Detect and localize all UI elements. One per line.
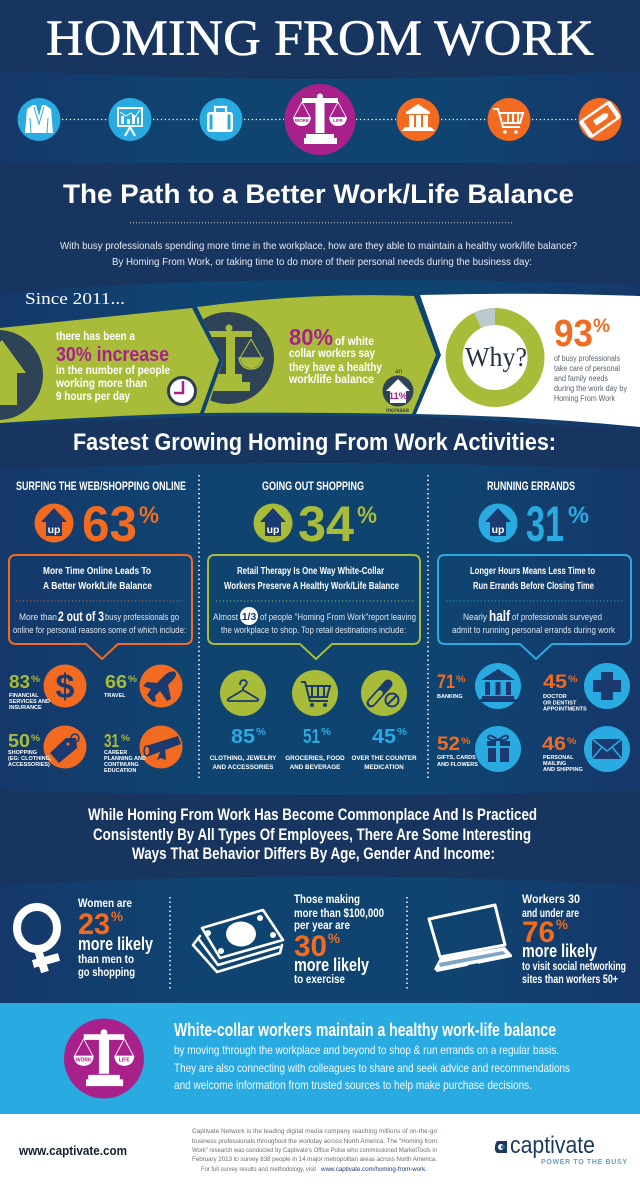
- item: shopping: ACCESSORIES): [8, 762, 50, 768]
- item: mail: AND SHIPPING: [543, 767, 583, 773]
- conclusion text: and welcome information from trusted sources to help make purchase decisions.: [174, 1078, 532, 1092]
- text: income stat: to exercise: [294, 974, 345, 986]
- item: banking: 71: [437, 672, 455, 693]
- text: 93 percent description: during the work day by: [554, 384, 627, 393]
- callout: online for personal reasons some of which include:: [13, 625, 186, 635]
- conclusion text: by moving through the workplace and beyond to shop & run errands on a regular basis.: [174, 1043, 559, 1057]
- stat: 93 percent: %: [593, 316, 610, 337]
- text: 30 percent: [55, 331, 170, 403]
- item: financial services: SERVICES AND: [9, 699, 50, 705]
- item: clothing: 85: [231, 726, 255, 748]
- item: career planning: %: [121, 733, 130, 743]
- item: medication: %: [397, 727, 407, 738]
- item: financial services: 83: [9, 672, 30, 692]
- text: income stat: more likely: [294, 955, 369, 975]
- panel: women: [17, 898, 153, 979]
- icon: work/life scale: LIFE: [119, 1057, 130, 1063]
- text: women stat: %: [111, 908, 124, 924]
- stat: up 34 percent: %: [357, 502, 377, 529]
- item: shopping: %: [31, 733, 40, 743]
- text: 30 percent: in the number of people: [56, 365, 170, 377]
- item: financial services: [9, 664, 86, 711]
- icon: suitcase: [200, 98, 242, 141]
- item: groceries: AND BEVERAGE: [290, 764, 340, 771]
- panel: conclusion: [0, 1003, 640, 1114]
- stat: up 31 percent: %: [568, 502, 589, 529]
- text: 80 percent: 80%: [289, 324, 333, 350]
- item: medication: [351, 670, 417, 771]
- item: gifts: GIFTS, CARDS: [437, 755, 476, 761]
- item: shopping: SHOPPING: [8, 750, 37, 756]
- heading: RUNNING ERRANDS: [487, 479, 575, 493]
- item: career planning: [104, 726, 182, 774]
- stat: up 63 percent: 63: [82, 496, 137, 552]
- text: 80 percent: [288, 324, 383, 386]
- stat: up 34 percent: 34: [298, 496, 354, 552]
- item: medication: MEDICATION: [364, 764, 404, 771]
- item: shopping: [8, 726, 86, 768]
- item: gifts: %: [461, 736, 471, 747]
- icon: work/life scale: WORK: [76, 1057, 92, 1063]
- text: 93 percent description: take care of personal: [554, 364, 620, 373]
- item: career planning: 31: [104, 731, 119, 751]
- text: 80 percent: of white: [335, 336, 374, 348]
- item: gifts: 52: [437, 734, 460, 755]
- item: financial services: %: [31, 674, 40, 684]
- callout: A Better Work/Life Balance: [43, 580, 152, 592]
- text: 93 percent description: [554, 354, 627, 403]
- item: doctor: OR DENTIST: [543, 700, 577, 706]
- about text: business professionals throughout the workday across North America. The "Homing from: [192, 1138, 437, 1145]
- text: young workers stat: %: [556, 916, 569, 932]
- item: financial services: FINANCIAL: [9, 693, 39, 699]
- icon: presentation chart: [108, 98, 152, 141]
- text: 30 percent: working more than: [55, 378, 147, 390]
- text: women stat: go shopping: [78, 967, 135, 979]
- item: shopping: (EG: CLOTHING,: [8, 756, 52, 762]
- item: clothing: [210, 670, 277, 771]
- icon: work/life scale: [64, 1018, 144, 1099]
- callout: [9, 555, 192, 659]
- item: gifts: [437, 726, 521, 772]
- icon: laptop: [429, 905, 512, 972]
- stat: up 63 percent: up: [48, 524, 60, 536]
- item: career planning: CAREER: [104, 750, 127, 756]
- item: financial services: INSURANCE: [9, 705, 42, 711]
- callout: Nearly: [463, 612, 487, 622]
- item: doctor: DOCTOR: [543, 694, 567, 700]
- text: income stat: Those making: [294, 894, 360, 906]
- text: women stat: more likely: [78, 934, 153, 954]
- text: 93 percent description: Homing From Work: [554, 394, 616, 403]
- item: doctor: APPOINTMENTS: [543, 706, 587, 712]
- callout: 1/3: [242, 611, 256, 623]
- heading: SURFING THE WEB/SHOPPING ONLINE: [16, 479, 186, 493]
- item: travel: TRAVEL: [104, 693, 126, 699]
- item: mail: MAILING: [543, 761, 566, 767]
- icon: house: [0, 330, 43, 420]
- stat: up 31 percent: 31: [526, 496, 564, 552]
- item: travel: %: [128, 674, 137, 684]
- text: 30 percent: there has been a: [56, 331, 136, 343]
- item: shopping: 50: [8, 731, 30, 751]
- text: young workers stat: and under are: [522, 908, 579, 920]
- item: mail: 46: [542, 734, 566, 755]
- icon: work/life scale: LIFE: [333, 118, 343, 123]
- icon: shopping cart: [488, 98, 530, 141]
- icon: jacket: [18, 98, 60, 141]
- callout: Workers Preserve A Healthy Work/Life Balance: [224, 580, 399, 592]
- intro text: [60, 241, 577, 268]
- stat: up 63 percent: [34, 496, 159, 552]
- callout: the workplace to shop. Top retail destinations include:: [221, 625, 406, 635]
- stat: up 34 percent: up: [267, 524, 279, 536]
- text: young workers stat: [522, 894, 626, 986]
- callout: 2 out of 3: [58, 608, 104, 624]
- text: young workers stat: more likely: [522, 941, 597, 961]
- icon: female symbol: [17, 907, 59, 972]
- text: 93 percent description: and family needs: [554, 374, 608, 383]
- panel: surfing the web: [8, 479, 192, 774]
- item: travel: [104, 664, 182, 708]
- text: 30 percent: 9 hours per day: [56, 391, 131, 403]
- panel: income: [193, 894, 384, 986]
- text: 80 percent: work/life balance: [288, 374, 374, 386]
- item: groceries: 51: [303, 726, 320, 748]
- logo: captivate: captivate: [510, 1132, 595, 1159]
- callout: Retail Therapy Is One Way White-Collar: [237, 565, 384, 577]
- badge: 11 percent increase: 11%: [389, 391, 408, 402]
- item: mail: [542, 726, 630, 773]
- badge: 11 percent increase: [382, 368, 414, 414]
- icon: stack of money: [193, 910, 283, 972]
- stat: 93 percent: 93: [554, 313, 593, 355]
- panel: arrow 30 percent increase: [0, 308, 219, 423]
- text: income stat: 30: [294, 930, 327, 963]
- title: HOMING FROM WORK: [46, 11, 594, 67]
- callout: Run Errands Before Closing Time: [473, 580, 594, 592]
- item: doctor: %: [568, 674, 578, 685]
- text: women stat: [78, 898, 153, 979]
- panel: arrow 80 percent: [182, 295, 436, 414]
- conclusion text: [174, 1043, 570, 1092]
- about text: Captivate Network is the leading digital media company reaching millions of on-the-go: [192, 1128, 437, 1135]
- item: banking: %: [456, 674, 466, 685]
- item: travel: 66: [105, 672, 127, 692]
- text: 30 percent: 30% increase: [56, 344, 169, 366]
- text: women stat: 23: [78, 908, 110, 941]
- chart: 93 percent donut: Why?: [465, 342, 527, 372]
- about text: February 2013 to survey 838 people in 14 major metropolitan areas across North America.: [192, 1156, 437, 1163]
- callout: Almost: [213, 612, 238, 622]
- callout: busy professionals go: [105, 612, 179, 622]
- item: mail: %: [567, 736, 577, 747]
- text: income stat: %: [328, 930, 341, 946]
- item: career planning: PLANNING AND: [104, 756, 146, 762]
- heading: behavior differs: Consistently By All Types Of Employees, There Are Some Interesting: [93, 826, 531, 844]
- heading: behavior differs: Ways That Behavior Differs By Age, Gender And Income:: [132, 845, 495, 863]
- icon row: [18, 84, 622, 155]
- item: gifts: AND FLOWERS: [437, 762, 478, 768]
- callout: half: [489, 608, 511, 625]
- item: clothing: %: [256, 727, 266, 738]
- heading: behavior differs: While Homing From Work Has Become Commonplace And Is Practiced: [88, 806, 537, 824]
- callout: admit to running personal errands during work: [452, 625, 615, 635]
- item: doctor: [543, 663, 630, 712]
- panel: going out shopping: [208, 479, 420, 771]
- stat: up 31 percent: up: [492, 524, 504, 536]
- heading: behavior differs: [88, 806, 537, 863]
- stat: up 31 percent: [478, 496, 589, 552]
- text: income stat: more than $100,000: [294, 908, 384, 920]
- logo: captivate: [495, 1132, 627, 1166]
- text: women stat: Women are: [78, 898, 132, 910]
- callout: Longer Hours Means Less Time to: [470, 565, 595, 577]
- item: financial services: $: [56, 668, 75, 706]
- panel: young workers: [429, 894, 626, 986]
- icon: bank: [396, 98, 440, 141]
- heading: path to better balance: The Path to a Better Work/Life Balance: [63, 179, 574, 209]
- callout: [438, 555, 631, 659]
- item: medication: OVER THE COUNTER: [351, 755, 417, 762]
- label: since 2011: Since 2011...: [25, 289, 125, 308]
- badge: 11 percent increase: an: [395, 368, 403, 375]
- heading: GOING OUT SHOPPING: [262, 479, 364, 493]
- item: clothing: CLOTHING, JEWELRY: [210, 755, 277, 762]
- text: income stat: per year are: [294, 920, 350, 932]
- chart: 93 percent donut: [454, 316, 536, 398]
- about text: Work" research was conducted by Captivate's Office Pulse who commissioned MarketTools in: [192, 1147, 437, 1154]
- callout: More than: [19, 612, 57, 622]
- heading: fastest growing: Fastest Growing Homing From Work Activities:: [73, 429, 556, 456]
- icon: scale: [203, 312, 274, 404]
- item: mail: PERSONAL: [543, 755, 574, 761]
- item: doctor: 45: [543, 672, 567, 693]
- text: 80 percent: they have a healthy: [289, 362, 383, 374]
- about text: For full survey results and methodology, visit: [201, 1166, 316, 1173]
- callout: of people "Homing From Work"report leaving: [260, 612, 416, 622]
- item: groceries: GROCERIES, FOOD: [285, 755, 345, 762]
- stat: up 63 percent: %: [139, 502, 159, 529]
- about text: www.captivate.com/homing-from-work.: [320, 1166, 427, 1173]
- text: 80 percent: collar workers say: [289, 348, 376, 360]
- footer: [0, 1114, 640, 1187]
- about text: [192, 1128, 437, 1173]
- item: banking: [437, 663, 521, 709]
- item: banking: BANKING: [437, 694, 463, 700]
- text: 93 percent description: of busy professionals: [554, 354, 620, 363]
- text: young workers stat: Workers 30: [522, 894, 580, 906]
- intro text: With busy professionals spending more time in the workplace, how are they able to maintain a healthy work/life balance?: [60, 241, 577, 252]
- item: career planning: EDUCATION: [104, 768, 136, 774]
- text: young workers stat: 76: [522, 916, 555, 949]
- conclusion text: They are also connecting with colleagues to share and seek advice and recommendations: [174, 1061, 570, 1075]
- item: groceries: %: [321, 727, 331, 738]
- item: career planning: CONTINUING: [104, 762, 139, 768]
- icon: work/life scale: WORK: [295, 118, 310, 123]
- item: clothing: AND ACCESSORIES: [212, 764, 274, 771]
- text: women stat: than men to: [78, 954, 134, 966]
- icon: mobile phone with tag: [578, 98, 622, 141]
- website: www.captivate.com: [18, 1143, 127, 1158]
- icon: work/life scale: [284, 84, 356, 155]
- stat: up 34 percent: [254, 496, 377, 552]
- badge: 11 percent increase: increase: [386, 407, 409, 414]
- icon: clock: [168, 378, 196, 404]
- text: income stat: [294, 894, 384, 986]
- callout: More Time Online Leads To: [43, 565, 151, 577]
- item: medication: 45: [372, 726, 396, 748]
- item: groceries: [285, 670, 345, 771]
- callout: of professionals surveyed: [512, 612, 602, 622]
- logo: captivate: POWER TO THE BUSY: [541, 1159, 627, 1166]
- panel: running errands: [437, 479, 631, 773]
- intro text: By Homing From Work, or taking time to do more of their personal needs during the business day:: [112, 257, 532, 268]
- panel: why: [416, 294, 640, 427]
- callout: [208, 555, 420, 659]
